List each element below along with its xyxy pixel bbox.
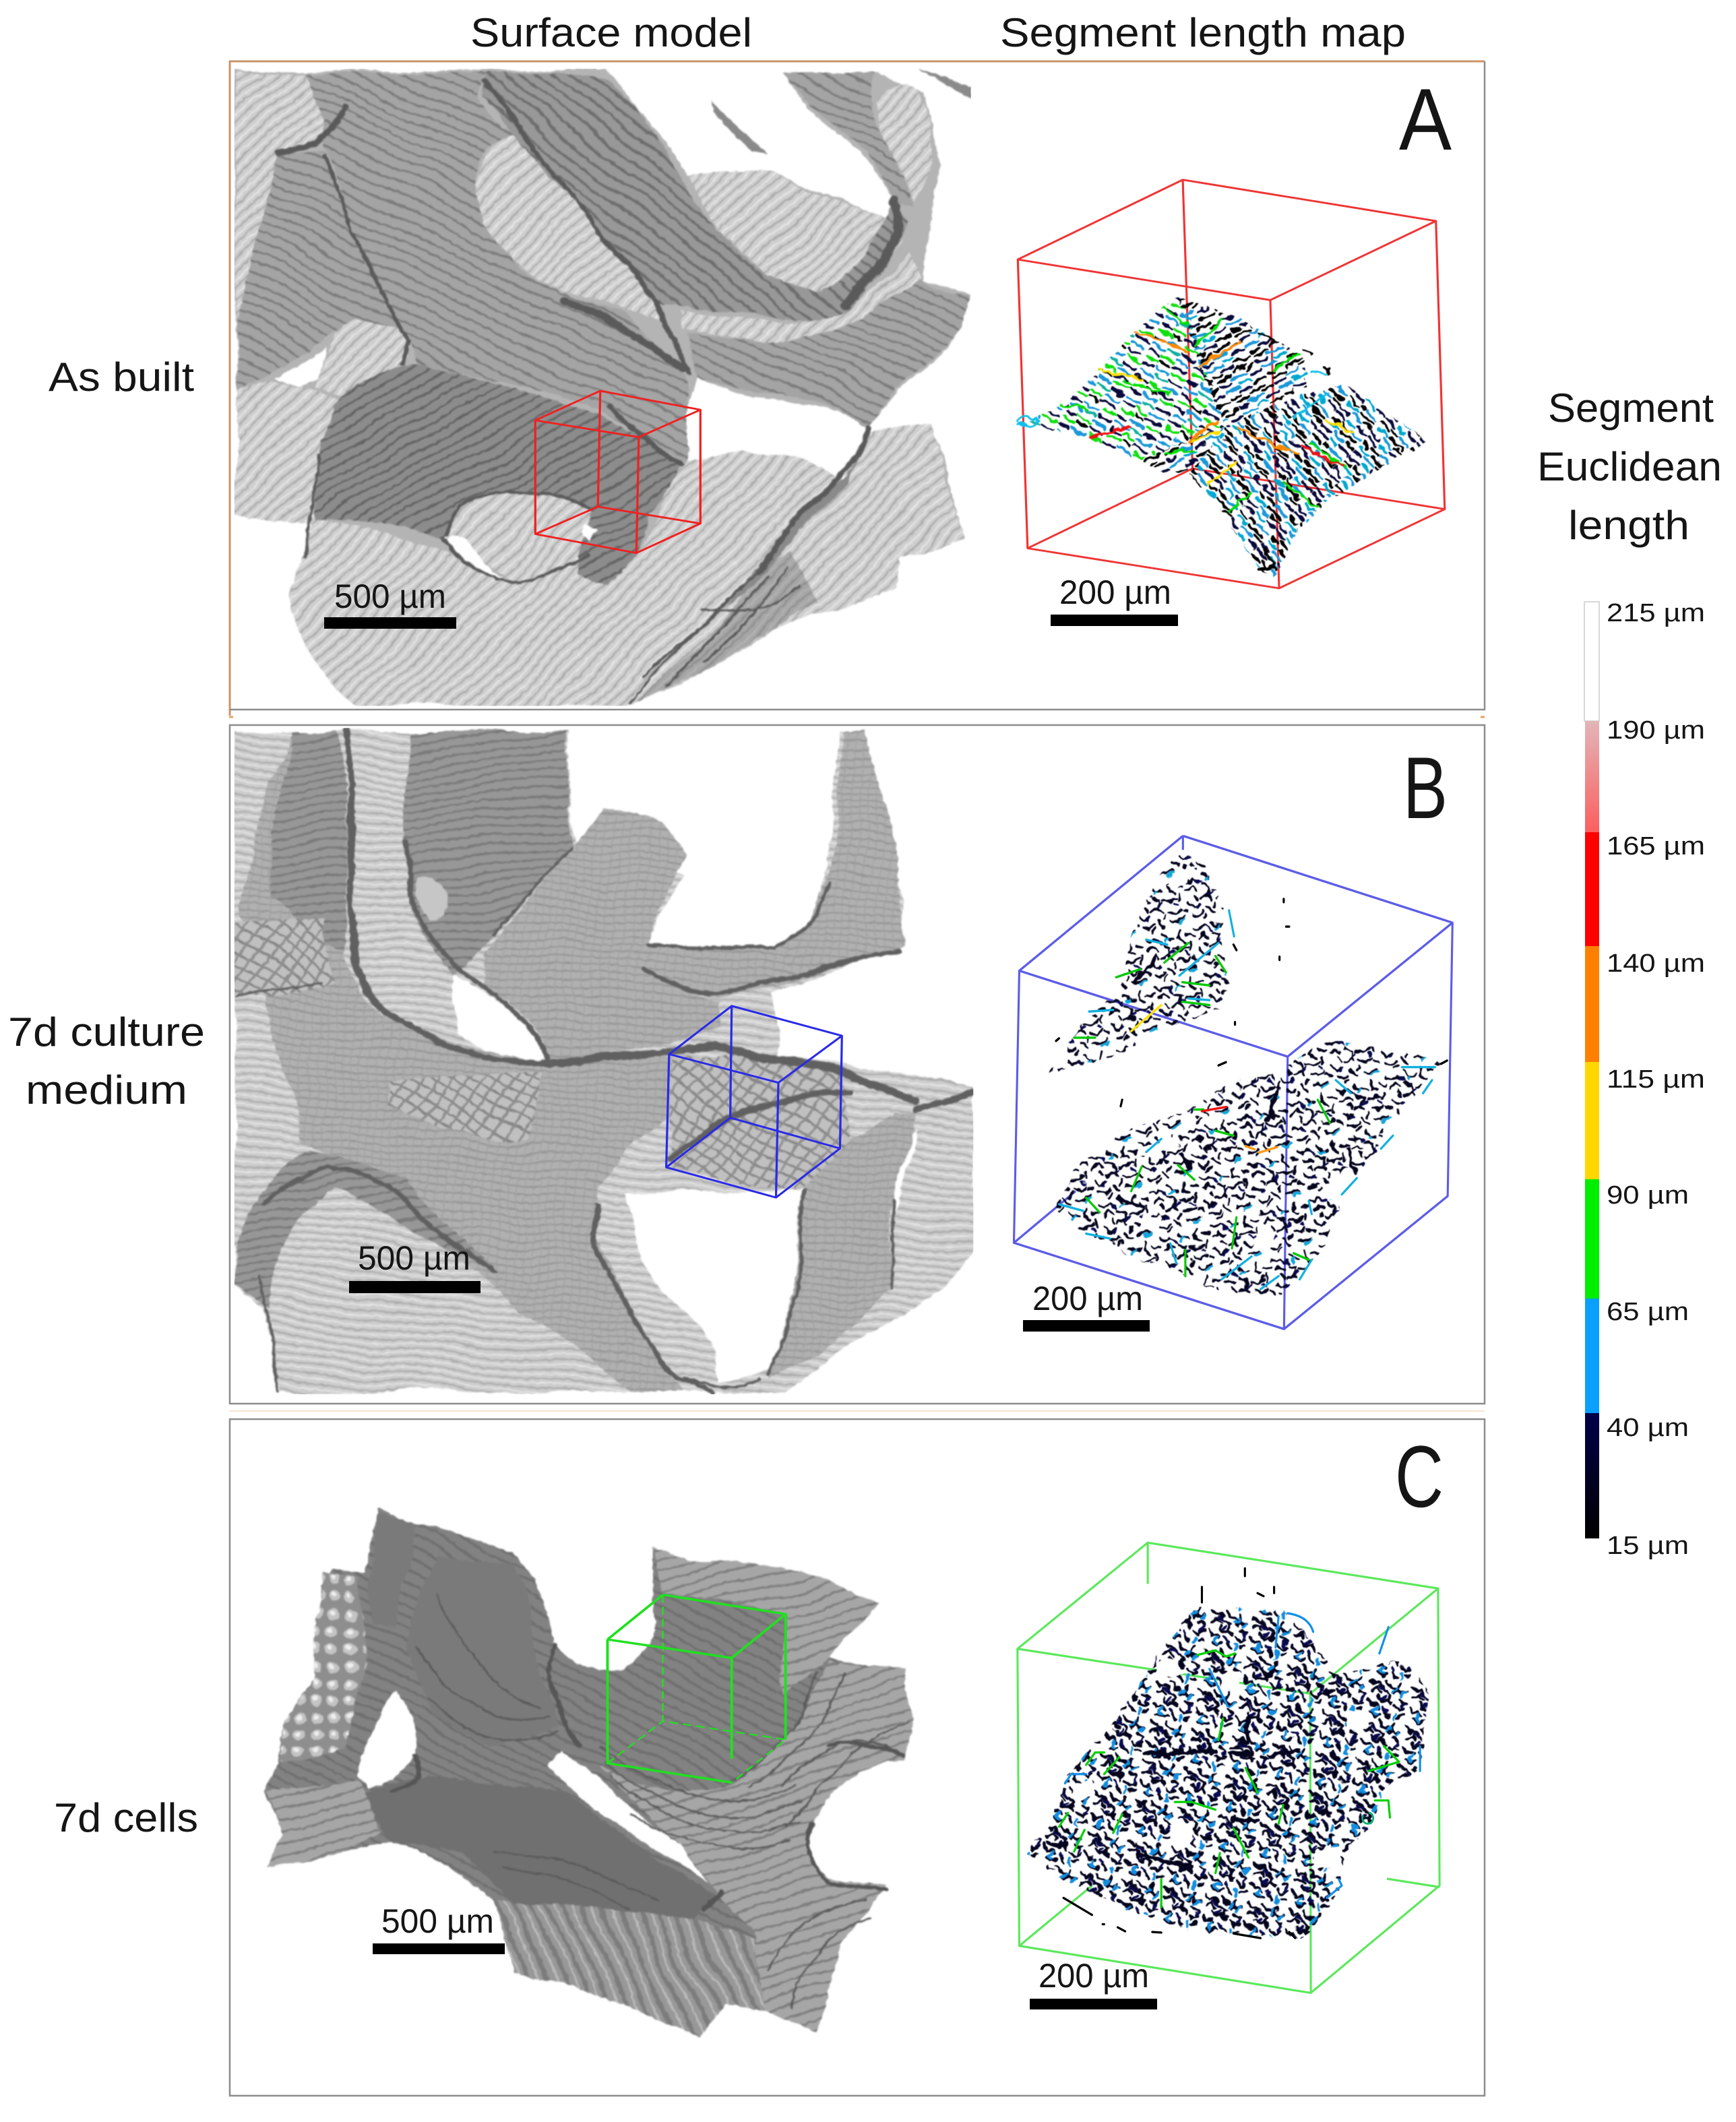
panel B frame (230, 725, 1485, 1404)
colour bar labels: 15 µm (1607, 1532, 1689, 1560)
segments C (1026, 1607, 1429, 1938)
colour bar labels: 65 µm (1607, 1298, 1689, 1326)
blue region cube on surface B (666, 1006, 842, 1197)
scale bar 200 µm C (1030, 1957, 1157, 2009)
faint orange divider (229, 1410, 1485, 1412)
colour bar labels: 165 µm (1607, 832, 1705, 861)
scale bar 500 µm C: 500 µm (381, 1902, 494, 1940)
scale bar 200 µm B (1023, 1280, 1150, 1332)
colour bar title (1537, 385, 1722, 548)
row label: 7d culture medium: 7d culture (8, 1009, 205, 1055)
row label: 7d cells: 7d cells (54, 1795, 198, 1840)
segments A (1018, 294, 1428, 577)
scale bar 200 µm A: 200 µm (1059, 573, 1171, 611)
row label: 7d culture medium: medium (26, 1067, 187, 1113)
scale bar 200 µm C: 200 µm (1038, 1957, 1149, 1995)
green region cube on surface C (607, 1595, 786, 1782)
scale bar 500 µm C (373, 1902, 505, 1954)
green bounding cube C (1018, 1542, 1439, 1993)
panel letter B: B (1403, 739, 1448, 837)
colour bar (1584, 602, 1599, 1538)
blue bounding cube B (1014, 836, 1452, 1329)
colour bar labels: 90 µm (1607, 1181, 1689, 1210)
scale bar 200 µm A (1051, 573, 1178, 626)
column heading: Surface model: Surface model (470, 10, 752, 55)
colour bar labels: 140 µm (1607, 949, 1705, 978)
colour bar labels: 115 µm (1607, 1065, 1705, 1094)
colour bar labels: 40 µm (1607, 1414, 1689, 1442)
segments B (1049, 850, 1444, 1296)
scale bar 500 µm A: 500 µm (334, 578, 446, 615)
surface model A (235, 69, 973, 706)
scale bar 500 µm B (349, 1239, 480, 1293)
panel A (229, 61, 1485, 717)
panel C frame (230, 1419, 1485, 2096)
scale bar 500 µm B: 500 µm (358, 1239, 470, 1277)
colour bar labels (1607, 599, 1705, 1560)
surface model B (235, 730, 973, 1392)
colour bar title: Euclidean (1537, 444, 1722, 489)
colour bar labels: 190 µm (1607, 716, 1705, 745)
scale bar 500 µm A (324, 578, 456, 629)
column heading: Segment length map: Segment length map (1000, 10, 1406, 55)
row label: As built: As built (49, 354, 194, 400)
segment map C (1018, 1542, 1439, 1993)
panel letter C: C (1395, 1427, 1444, 1526)
red region cube on surface A (535, 391, 700, 553)
segment map B (1014, 836, 1452, 1329)
row label: 7d culture medium (8, 1009, 205, 1113)
panel A frame (229, 61, 1485, 717)
colour bar labels: 215 µm (1607, 599, 1705, 627)
surface model C (266, 1509, 908, 2036)
red bounding cube A (1018, 180, 1445, 588)
panel C (230, 1419, 1485, 2096)
panel letter A: A (1399, 70, 1452, 168)
colour bar title: Segment (1548, 385, 1714, 431)
scale bar 200 µm B: 200 µm (1032, 1280, 1143, 1317)
panel B (230, 725, 1485, 1404)
segment map A (1018, 180, 1445, 588)
colour bar title: length (1568, 503, 1690, 548)
